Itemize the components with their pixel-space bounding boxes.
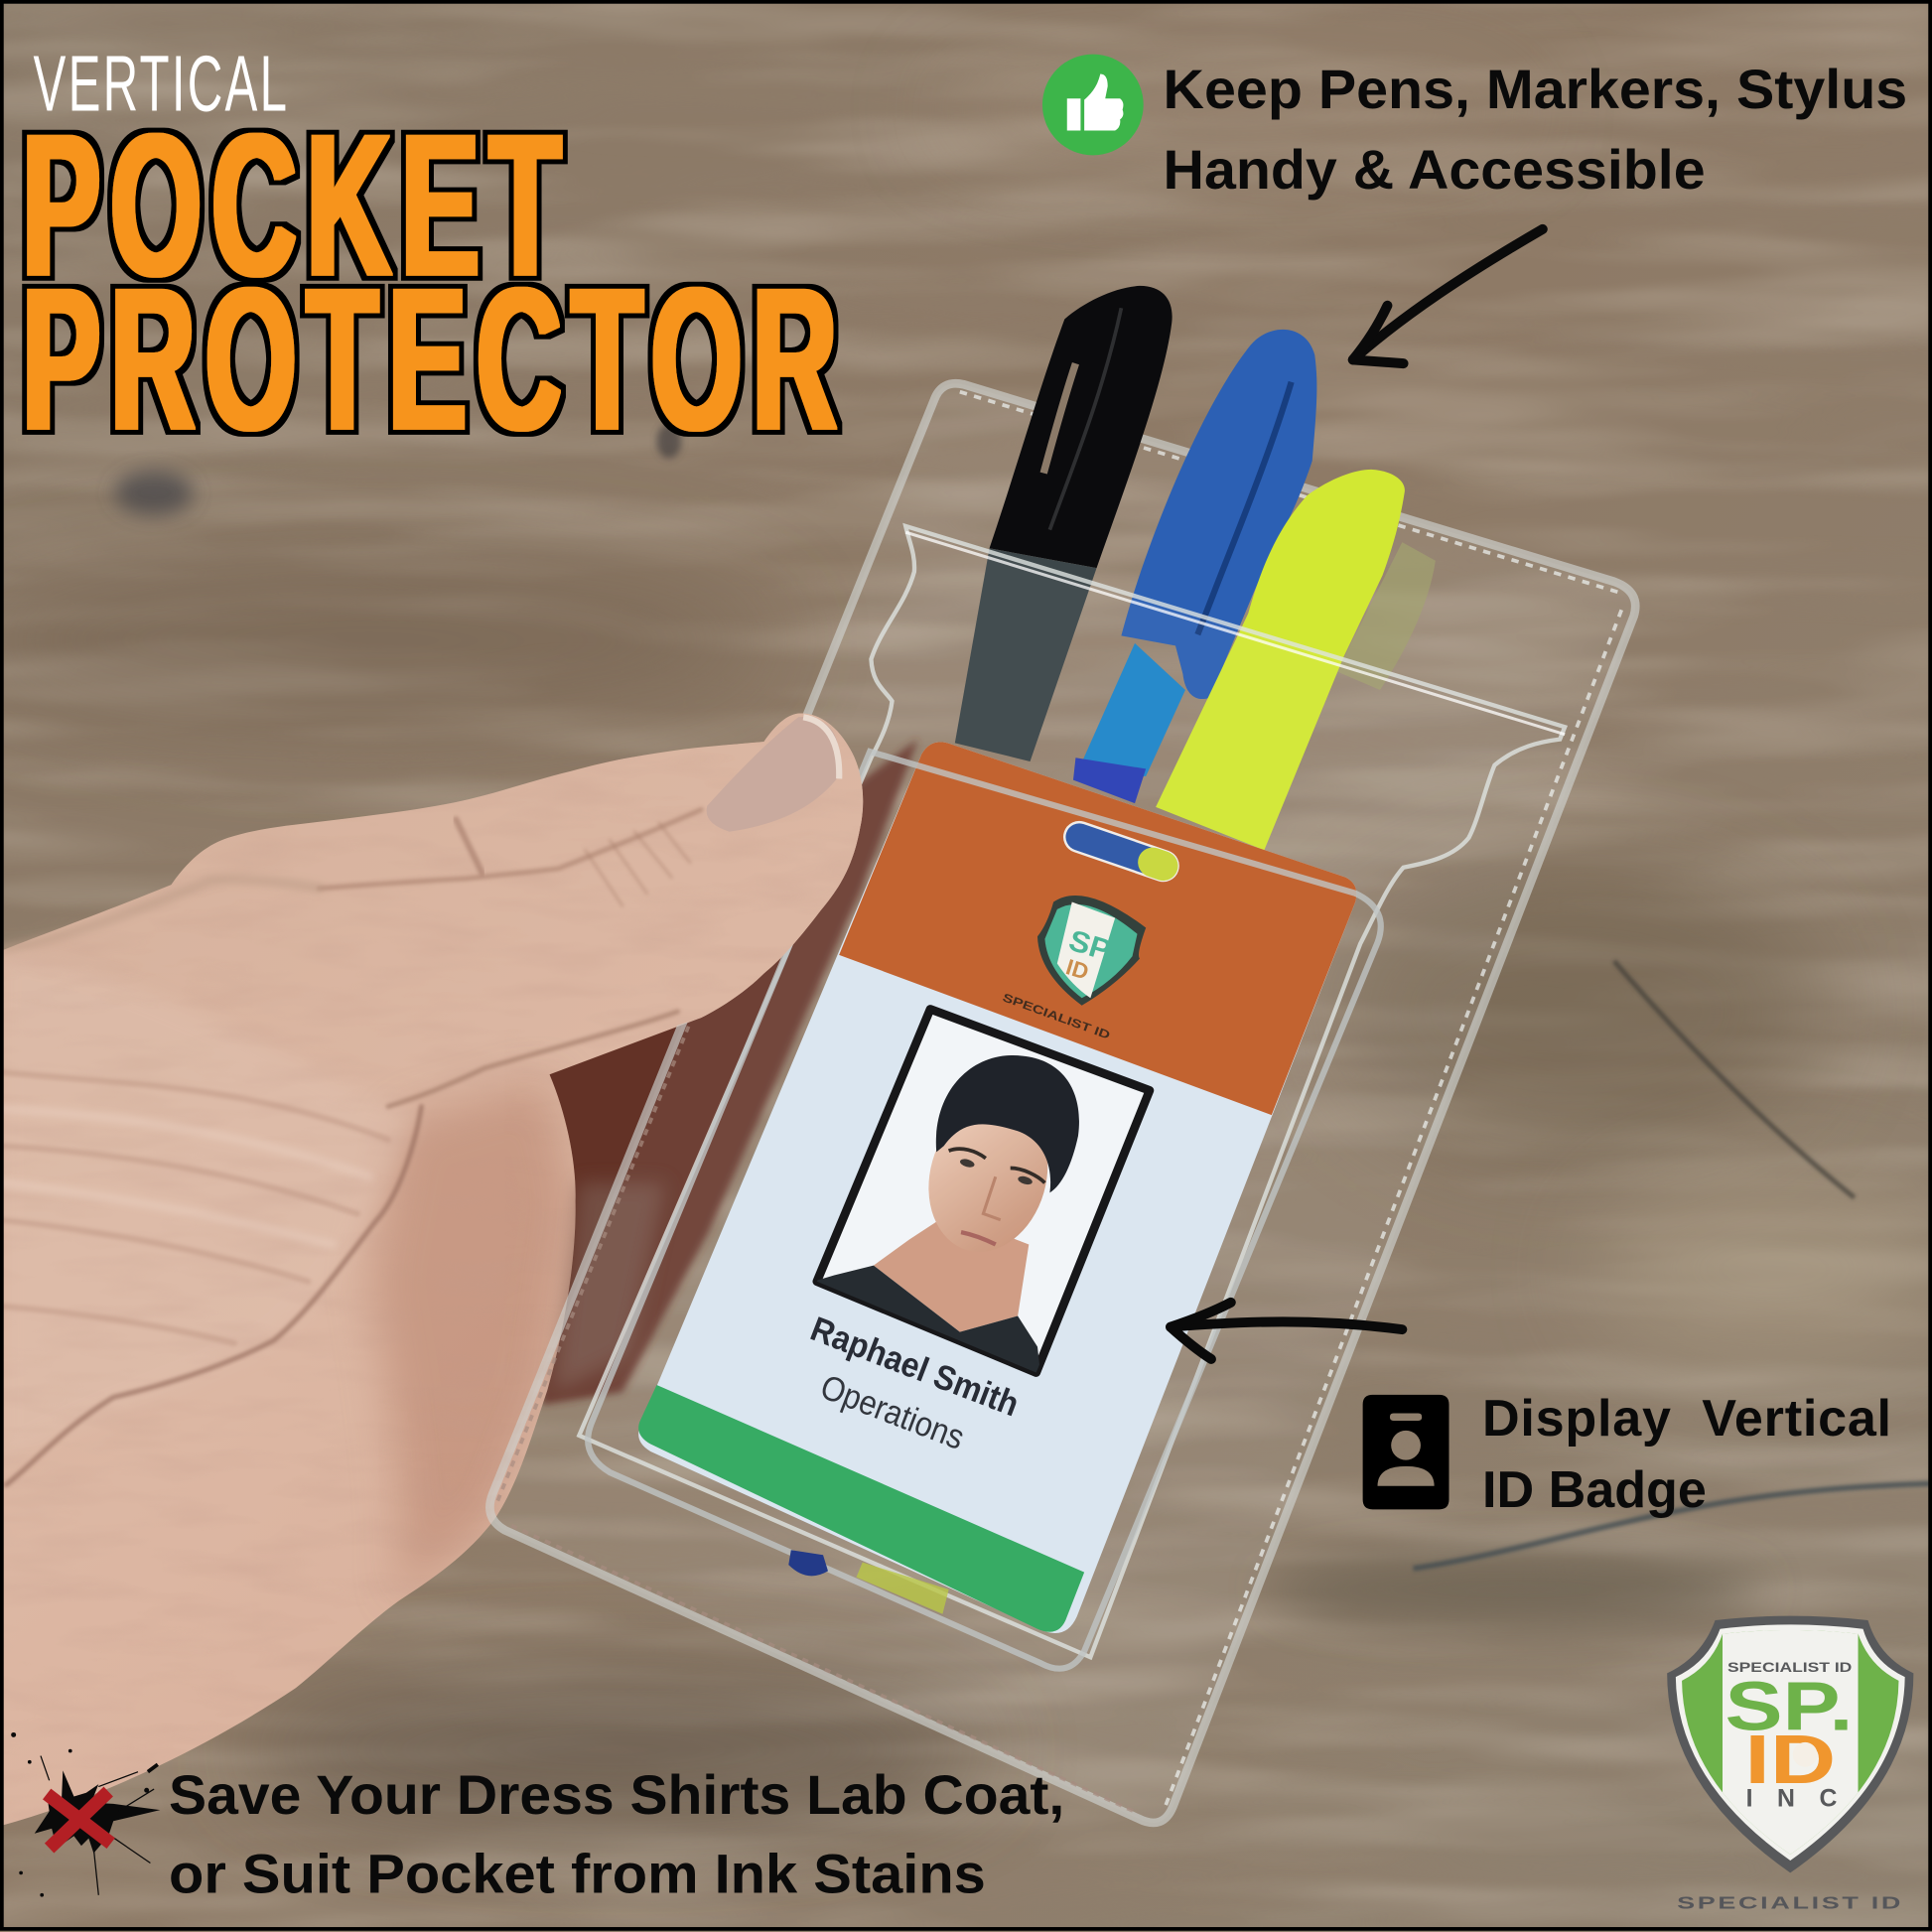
pocket front flap and inner sleeve (579, 526, 1565, 1669)
card name: Raphael Smith (805, 1311, 1024, 1424)
skin texture (0, 690, 888, 1849)
specialist id logo: SPECIALIST ID (1677, 1892, 1900, 1912)
icon: id badge (1363, 1395, 1449, 1509)
fingers seen through pocket (530, 740, 918, 1405)
pen: black marker (955, 286, 1173, 761)
specialist id logo: SP. (1725, 1667, 1854, 1744)
lanyard slot (1060, 818, 1182, 885)
callout: display vertical id badge: Display Vertical (1482, 1390, 1891, 1448)
arrow: to pens (1353, 229, 1543, 363)
pen: blue marker (1073, 330, 1316, 803)
callout: save your shirts: Save Your Dress Shirts Lab Coat, (169, 1763, 1064, 1826)
hand creases (0, 809, 701, 1484)
card brand name: SPECIALIST ID (1001, 991, 1112, 1042)
callout: save your shirts (169, 1763, 1064, 1904)
specialist id logo: SPECIALIST ID (1727, 1660, 1852, 1676)
card logo: ID (1063, 954, 1092, 985)
card orange header (839, 742, 1356, 1115)
callout: save your shirts: or Suit Pocket from Ink Stains (169, 1842, 986, 1904)
thumb in front of pocket (4, 713, 864, 1489)
callout: keep pens handy: Handy & Accessible (1164, 138, 1706, 201)
arrow: to badge (1171, 1303, 1402, 1359)
title: protector: PROTECTOR (22, 246, 837, 473)
card green footer (638, 1385, 1084, 1632)
thumb nail (707, 717, 838, 832)
card logo: SP (1065, 924, 1115, 968)
specialist id logo: INC (1746, 1785, 1838, 1812)
hand behind pocket (0, 714, 863, 1826)
card logo (1037, 896, 1146, 1006)
callout: keep pens handy (1164, 58, 1907, 201)
icon: ink splat with red x (11, 1732, 160, 1897)
id badge card (638, 742, 1356, 1633)
icon: green thumbs up (1042, 55, 1144, 155)
clear pocket protector back sleeve (489, 383, 1635, 1823)
specialist id logo (1667, 1616, 1913, 1912)
photo frame with portrait (813, 1009, 1150, 1380)
specialist id logo: ID (1744, 1721, 1836, 1798)
callout: keep pens handy: Keep Pens, Markers, Stylus (1164, 58, 1907, 120)
title: vertical: VERTICAL (34, 41, 287, 129)
pen: yellow highlighter (1156, 470, 1436, 850)
card department: Operations (815, 1368, 969, 1457)
callout: display vertical id badge: ID Badge (1482, 1461, 1707, 1519)
title: pocket: POCKET (22, 92, 561, 319)
callout: display vertical id badge (1482, 1390, 1891, 1519)
